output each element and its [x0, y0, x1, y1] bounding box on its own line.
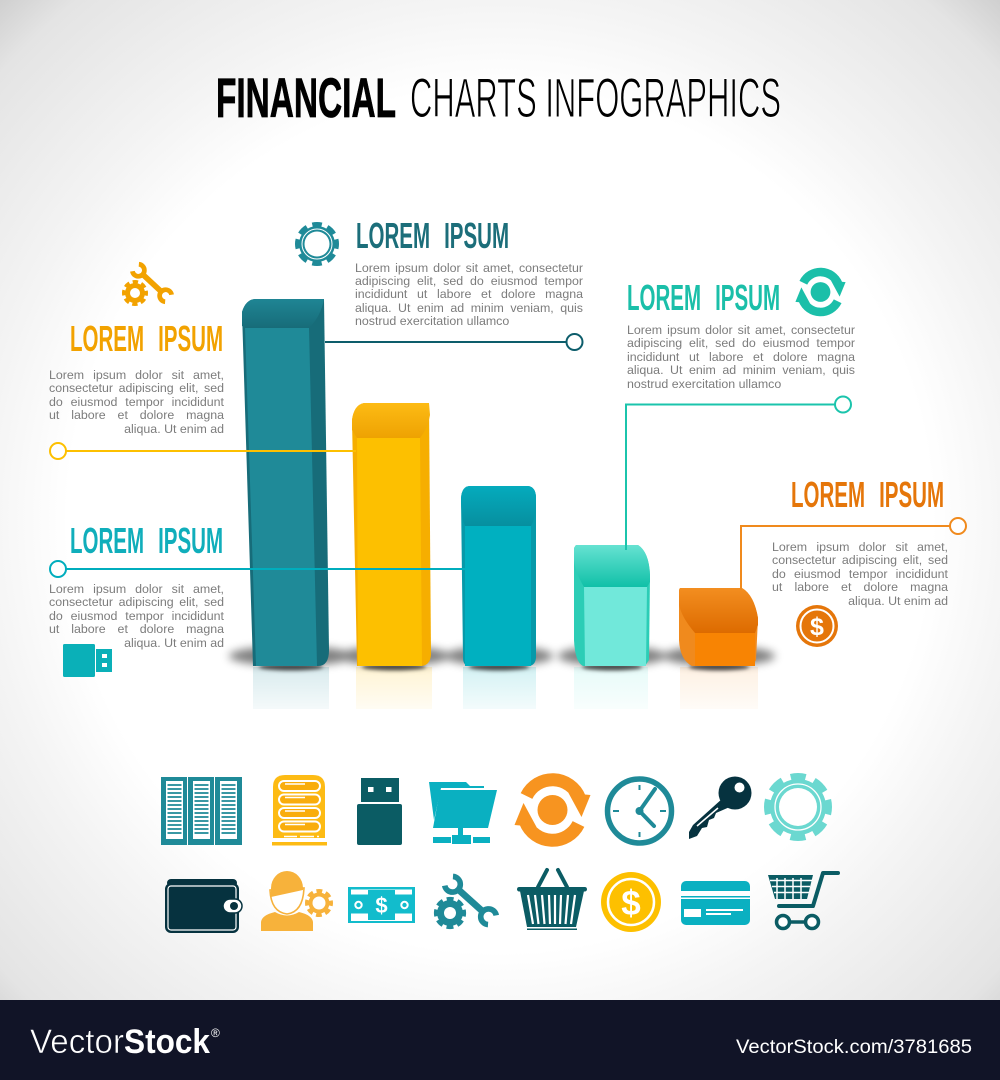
icon: clock [608, 779, 672, 843]
icon: wrench and gear teal [436, 875, 497, 927]
watermark logo: ® [211, 1026, 220, 1040]
text block: cyan: Lorem ipsum dolor sit amet, [49, 582, 224, 596]
connector: cyan [50, 561, 465, 577]
text block: cyan: do eiusmod tempor incididunt [49, 609, 224, 623]
text block: orange: aliqua. Ut enim ad [848, 594, 948, 608]
icon: dollar coin yellow: $ [621, 884, 641, 923]
icon: usb [357, 778, 402, 845]
watermark logo: Stock [124, 1023, 210, 1061]
bar 4: turquoise [574, 545, 650, 666]
text block: cyan: consectetur adipiscing elit, sed [49, 595, 224, 609]
icon: gear teal [298, 224, 336, 264]
icon row 1 [161, 775, 828, 846]
icon: lockers [161, 777, 242, 845]
text block: turquoise: nostrud exercitation ullamco [627, 377, 781, 391]
icon: dollar coin yellow [601, 872, 661, 932]
connector: orange [741, 518, 966, 590]
heading: orange: LOREM IPSUM [791, 475, 944, 516]
text block: orange: consectetur adipiscing elit, sed [772, 553, 948, 567]
bar shadows [229, 646, 775, 670]
text block: orange: do eiusmod tempor incididunt [772, 567, 948, 581]
icon: shopping cart [768, 873, 838, 928]
text block: yellow: aliqua. Ut enim ad [124, 422, 224, 436]
icon: banknote: $ [375, 893, 388, 918]
watermark logo: Vector [30, 1023, 124, 1061]
text block: turquoise: adipiscing elit, sed do eiusmod tempor [627, 336, 855, 350]
icon: key [689, 776, 752, 839]
icon: credit card [681, 881, 750, 925]
text block: orange [772, 540, 948, 608]
connector: dark teal [325, 334, 582, 350]
text block: cyan: aliqua. Ut enim ad [124, 636, 224, 650]
text block: cyan: ut labore et dolore magna [49, 622, 224, 636]
text block: yellow: ut labore et dolore magna [49, 408, 224, 422]
footer bar [0, 1000, 1000, 1080]
icon: banknote [348, 887, 415, 923]
heading: teal: LOREM IPSUM [356, 216, 509, 257]
bar 1: dark teal [242, 299, 329, 666]
text block: teal: Lorem ipsum dolor sit amet, consectetur [355, 260, 583, 274]
watermark url: VectorStock.com/3781685 [736, 1036, 972, 1058]
text block: yellow: do eiusmod tempor incididunt [49, 395, 224, 409]
heading: turquoise: LOREM IPSUM [627, 278, 780, 319]
icon: basket [517, 870, 587, 930]
icon: wrench and gear orange [124, 263, 172, 304]
text block: turquoise: aliqua. Ut enim ad minim veniam, quis [627, 363, 855, 377]
text block: cyan [49, 582, 224, 650]
bar chart [242, 299, 758, 666]
icon row 2 [165, 870, 838, 933]
icon: wallet [165, 879, 242, 933]
text block: teal [355, 260, 583, 328]
text block: teal: nostrud exercitation ullamco [355, 314, 509, 328]
connector: yellow [50, 443, 356, 459]
icon: usb small [63, 644, 112, 677]
text block: turquoise [627, 323, 855, 391]
heading: yellow: LOREM IPSUM [70, 319, 223, 360]
text block: turquoise: Lorem ipsum dolor sit amet, consectetur [627, 323, 855, 337]
heading: cyan: LOREM IPSUM [70, 521, 223, 562]
text block: turquoise: incididunt ut labore et dolore magna [627, 350, 855, 364]
icon: network folder [429, 782, 497, 844]
icon: dollar coin orange: $ [810, 613, 824, 641]
text block: teal: adipiscing elit, sed do eiusmod tempor [355, 274, 583, 288]
watermark logo [30, 1023, 220, 1061]
text block: teal: incididunt ut labore et dolore magna [355, 287, 583, 301]
text block: yellow [49, 368, 224, 436]
icon: gear light [768, 776, 828, 838]
text block: teal: aliqua. Ut enim ad minim veniam, quis [355, 301, 583, 315]
text block: yellow: consectetur adipiscing elit, sed [49, 381, 224, 395]
bar 2: yellow [352, 403, 431, 666]
icon: dollar coin orange [796, 605, 838, 647]
title [216, 66, 781, 129]
bar reflections [240, 667, 770, 710]
connector: turquoise [626, 396, 851, 550]
text block: orange: Lorem ipsum dolor sit amet, [772, 540, 948, 554]
title: FINANCIAL [216, 66, 396, 129]
icon: person with gear [261, 871, 331, 931]
text block: orange: ut labore et dolore magna [772, 580, 948, 594]
icon: refresh turquoise [795, 272, 846, 312]
icon: refresh orange [514, 780, 590, 840]
bar 5: orange [679, 588, 758, 666]
bar 3: cyan [461, 486, 536, 666]
text block: yellow: Lorem ipsum dolor sit amet, [49, 368, 224, 382]
icon: server [272, 775, 327, 846]
